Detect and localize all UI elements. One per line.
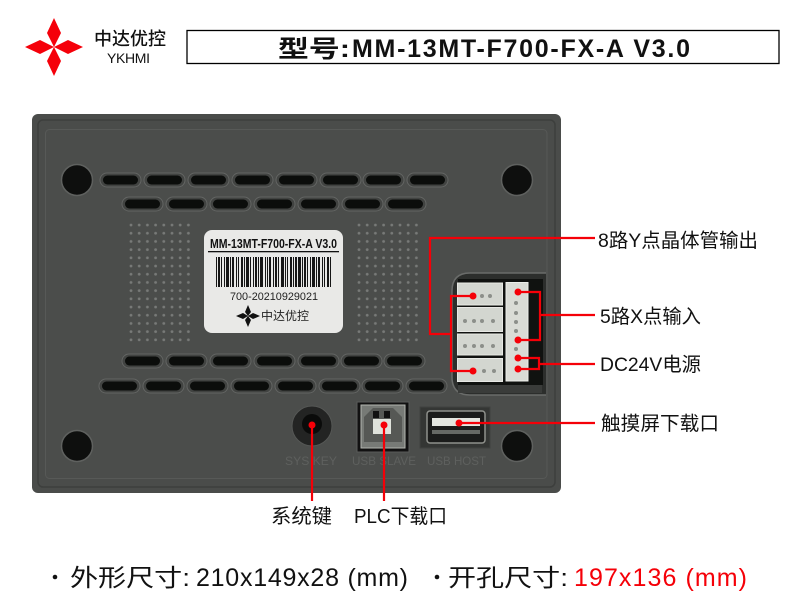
callout: PLC download port (354, 422, 447, 528)
input terminal block (506, 282, 528, 381)
outer dimensions (53, 564, 408, 592)
logo (25, 18, 166, 76)
bottom vent slots row 1 (122, 354, 425, 368)
callout: 5 way X inputs (514, 288, 701, 344)
product label: 中达优控 (261, 308, 309, 323)
cutout dimensions: 197x136 (mm) (574, 564, 747, 592)
logo latin name: YKHMI (107, 50, 150, 66)
silkscreen port labels: USB SLAVE (352, 454, 416, 468)
product label (204, 230, 343, 333)
callout: touch screen download port: 触摸屏下载口 (601, 413, 719, 435)
silkscreen port labels: USB HOST (427, 454, 487, 468)
bottom vent slots row 2 (99, 379, 447, 393)
title box: 型号: (278, 36, 350, 63)
callout: DC24V power: DC24V电源 (600, 354, 701, 376)
callout: PLC download port: PLC下载口 (354, 505, 447, 528)
barcode (216, 257, 331, 287)
panel: device rear housing (32, 114, 561, 493)
label logo (236, 305, 260, 327)
mounting holes (62, 164, 532, 462)
USB slave port (357, 402, 409, 452)
callout: system key (271, 422, 332, 528)
terminal pins (463, 294, 518, 373)
callout: system key: 系统键 (271, 505, 332, 528)
cutout dimensions: 开孔尺寸: (448, 565, 568, 592)
silkscreen port labels (285, 454, 487, 468)
left speaker dots (127, 221, 193, 344)
outer dimensions: 外形尺寸: (70, 565, 190, 592)
terminal recess (452, 273, 546, 395)
product label: MM-13MT-F700-FX-A V3.0 (210, 236, 337, 251)
callout: DC24V power (514, 354, 701, 376)
top vent slots row 2 (122, 197, 426, 211)
right speaker dots (355, 221, 421, 344)
output terminal blocks (458, 283, 502, 382)
dimensions footer (53, 564, 747, 592)
icon: red four-diamond mark (25, 18, 83, 76)
silkscreen port labels: SYS KEY (285, 454, 337, 468)
callout: touch screen download port (456, 413, 719, 435)
title box (187, 30, 779, 64)
cutout dimensions (435, 564, 747, 592)
USB host port (420, 407, 490, 448)
callout: 5 way X inputs: 5路X点输入 (600, 306, 701, 328)
product label: 700-20210929021 (230, 291, 318, 303)
title box: MM-13MT-F700-FX-A V3.0 (352, 35, 690, 63)
logo name: 中达优控 (94, 29, 166, 49)
system key button (292, 406, 332, 446)
outer dimensions: 210x149x28 (mm) (196, 564, 408, 592)
top vent slots row 1 (100, 173, 448, 187)
callout: 8 way Y outputs: 8路Y点晶体管输出 (598, 230, 758, 252)
callout: 8 way Y outputs (430, 230, 758, 374)
